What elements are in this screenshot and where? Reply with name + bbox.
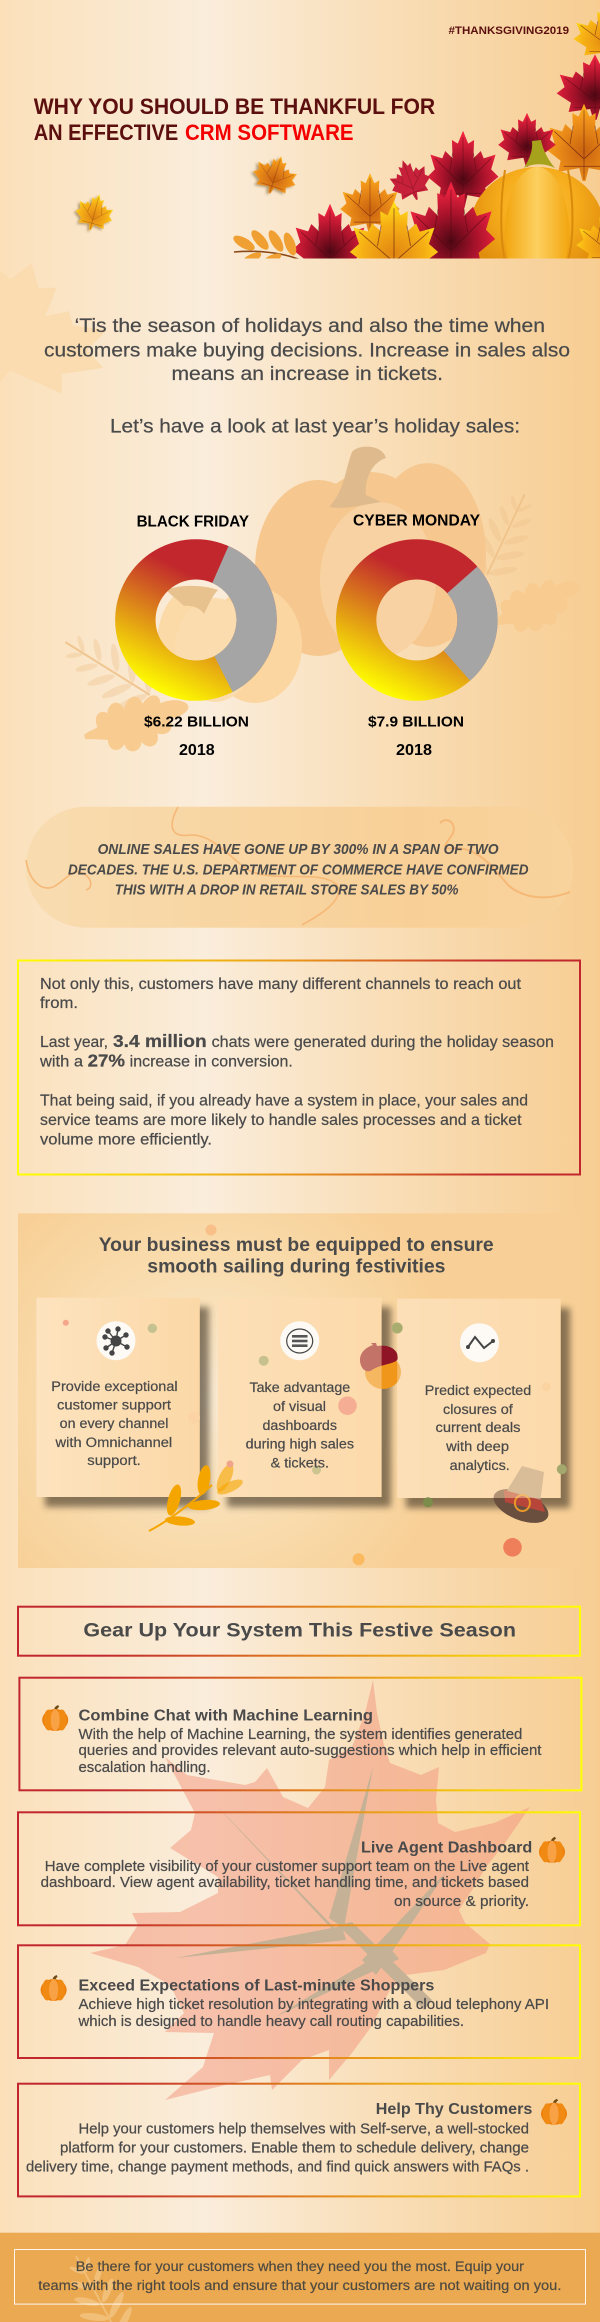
description: Have complete visibility of your customer support team on the Live agent bbox=[45, 1859, 529, 1875]
icon: dashboards bbox=[280, 1321, 319, 1360]
leaf: big red front bbox=[410, 182, 495, 258]
callout text: DECADES. THE U.S. DEPARTMENT OF COMMERCE HAVE CONFIRMED bbox=[68, 862, 529, 878]
golden branch bbox=[149, 1462, 245, 1531]
leaf: amber right bbox=[547, 104, 600, 181]
paragraphs: 3.4 million bbox=[113, 1031, 207, 1051]
description: Achieve high ticket resolution by integrating with a cloud telephony API bbox=[78, 1997, 549, 2013]
paragraphs: with a bbox=[39, 1054, 83, 1071]
heading: Combine Chat with Machine Learning bbox=[78, 1708, 373, 1725]
feature box: Exceed Expectations of Last-minute Shoppers bbox=[18, 1945, 580, 2058]
card 3 text: current deals bbox=[436, 1420, 521, 1435]
card 3 text: Predict expected bbox=[425, 1383, 531, 1398]
intro text: Let’s have a look at last year’s holiday sales: bbox=[110, 417, 520, 438]
faded oak leaf right bbox=[484, 567, 590, 645]
description: dashboard. View agent availability, ticket handling time, and tickets based bbox=[41, 1875, 529, 1891]
background maple leaf, top left bbox=[0, 232, 127, 418]
leaf: big red behind pumpkin bbox=[427, 131, 499, 208]
card 1 text: with Omnichannel bbox=[54, 1435, 172, 1450]
icon: pumpkin bbox=[539, 1837, 565, 1863]
card 2 text: & tickets. bbox=[271, 1455, 329, 1470]
callout text: THIS WITH A DROP IN RETAIL STORE SALES BY 50% bbox=[115, 883, 459, 899]
footer frame bbox=[14, 2250, 586, 2304]
description bbox=[26, 2121, 529, 2175]
card 1 text: support. bbox=[87, 1453, 141, 1468]
feature box: Live Agent Dashboard bbox=[18, 1812, 580, 1925]
chart: Cyber Monday bbox=[336, 513, 498, 759]
pilgrim hat bbox=[489, 1466, 553, 1530]
icon: analytics bbox=[460, 1323, 499, 1362]
pumpkin bbox=[474, 140, 600, 258]
paragraphs: That being said, if you already have a system in place, your sales and bbox=[40, 1093, 528, 1110]
label: Cyber Monday: CYBER MONDAY bbox=[353, 513, 480, 530]
year: 2018 bbox=[396, 742, 432, 759]
card fade overlay bbox=[218, 1298, 561, 1498]
card 2 text bbox=[246, 1380, 354, 1470]
year: 2018 bbox=[179, 742, 215, 759]
icon: omnichannel network bbox=[96, 1321, 136, 1360]
paragraphs: from. bbox=[40, 995, 78, 1012]
leaf: amber left of cluster bbox=[340, 173, 400, 234]
footer bbox=[0, 2233, 600, 2322]
card 2 text: during high sales bbox=[246, 1436, 354, 1451]
card shadows bbox=[45, 1307, 570, 1508]
heading: Live Agent Dashboard bbox=[361, 1840, 532, 1857]
leaf: yellow top right bbox=[574, 12, 600, 56]
leaf: red lower left bbox=[296, 204, 364, 258]
value: $6.22 billion: $6.22 BILLION bbox=[144, 714, 249, 731]
leaf: red right edge bbox=[557, 54, 600, 120]
panel: equipped business bbox=[18, 1213, 580, 1568]
intro text: ‘Tis the season of holidays and also the time when bbox=[75, 316, 545, 337]
title bbox=[34, 94, 435, 145]
squiggle decoration bbox=[26, 807, 570, 925]
intro text: customers make buying decisions. Increase in sales also bbox=[44, 341, 570, 362]
title: AN EFFECTIVE bbox=[34, 120, 178, 145]
decorative dot top bbox=[206, 1224, 216, 1236]
card 2 text: dashboards bbox=[262, 1418, 337, 1433]
callout text bbox=[68, 842, 529, 899]
faded left fern bbox=[50, 617, 167, 721]
description: queries and provides relevant auto-suggestions which help in efficient bbox=[78, 1743, 542, 1759]
description: With the help of Machine Learning, the system identifies generated bbox=[78, 1727, 522, 1743]
chart: Black Friday bbox=[115, 514, 277, 759]
card 1 background bbox=[36, 1298, 200, 1497]
faded oak leaf left bbox=[78, 684, 196, 763]
card 1 text: Provide exceptional bbox=[51, 1379, 178, 1394]
title: CRM SOFTWARE bbox=[185, 120, 354, 145]
heading: Your business must be equipped to ensure bbox=[99, 1234, 494, 1256]
leaf: yellow bottom right bbox=[576, 217, 600, 258]
card 3 background bbox=[397, 1299, 561, 1498]
callout text: ONLINE SALES HAVE GONE UP BY 300% IN A SPAN OF TWO bbox=[98, 842, 499, 858]
floating leaf: centre bbox=[249, 150, 302, 200]
orange leaf branch bbox=[233, 230, 299, 258]
floating leaf: left bbox=[72, 189, 118, 235]
leaf: small crimson bbox=[498, 113, 556, 167]
heading: Help Thy Customers bbox=[376, 2101, 532, 2118]
paragraphs: service teams are more likely to handle sales processes and a ticket bbox=[40, 1112, 522, 1129]
card 3 text bbox=[425, 1383, 531, 1473]
decorative dots bbox=[63, 1320, 567, 1565]
description: on source & priority. bbox=[394, 1894, 529, 1910]
panel: channels text box bbox=[18, 960, 580, 1174]
section heading box bbox=[18, 1607, 580, 1656]
card 1 text: customer support bbox=[57, 1397, 171, 1412]
label: Black Friday: BLACK FRIDAY bbox=[137, 514, 249, 531]
donut: Cyber Monday bbox=[336, 539, 498, 701]
description: escalation handling. bbox=[78, 1760, 210, 1776]
footer fern bbox=[53, 2244, 142, 2322]
card 2 text: of visual bbox=[273, 1399, 326, 1414]
paragraphs: 27% bbox=[88, 1051, 125, 1071]
donut: Black Friday bbox=[115, 539, 277, 701]
paragraphs: volume more efficiently. bbox=[40, 1131, 212, 1148]
header illustration: pumpkin and autumn leaves bbox=[233, 12, 600, 258]
value: $7.9 billion: $7.9 BILLION bbox=[368, 714, 464, 731]
leaf: yellow front bbox=[350, 201, 438, 258]
paragraphs bbox=[39, 976, 554, 1148]
card 3 text: analytics. bbox=[450, 1458, 510, 1473]
paragraphs: Last year, bbox=[40, 1034, 108, 1051]
description: delivery time, change payment methods, and find quick answers with FAQs . bbox=[26, 2159, 529, 2175]
footer text: Be there for your customers when they need you the most. Equip your bbox=[76, 2259, 525, 2274]
faded small pumpkin bbox=[157, 586, 302, 703]
hashtag: #THANKSGIVING2019 bbox=[448, 25, 569, 37]
description bbox=[78, 1727, 542, 1776]
icon: pumpkin bbox=[41, 1975, 67, 2001]
icon: pumpkin bbox=[42, 1705, 68, 1731]
faded right fern bbox=[462, 483, 549, 587]
faded large pumpkin bbox=[255, 447, 486, 658]
leaf veins bbox=[176, 1767, 448, 2017]
feature box: Combine Chat with Machine Learning bbox=[19, 1678, 581, 1790]
card 1 text bbox=[51, 1379, 178, 1468]
background faded pumpkin illustration bbox=[50, 447, 590, 763]
leaf: crimson sprig bbox=[390, 160, 430, 200]
description: platform for your customers. Enable them to schedule delivery, change bbox=[60, 2140, 529, 2156]
intro text bbox=[44, 316, 570, 438]
title: WHY YOU SHOULD BE THANKFUL FOR bbox=[34, 94, 435, 119]
card 1 text: on every channel bbox=[60, 1416, 168, 1431]
footer text: teams with the right tools and ensure that your customers are not waiting on you. bbox=[38, 2278, 561, 2293]
callout pill bbox=[26, 807, 573, 928]
intro text: means an increase in tickets. bbox=[172, 364, 443, 385]
description: which is designed to handle heavy call routing capabilities. bbox=[77, 2014, 464, 2030]
card 3 text: with deep bbox=[445, 1439, 509, 1454]
description bbox=[77, 1997, 549, 2030]
card 2 text: Take advantage bbox=[250, 1380, 350, 1395]
acorn bbox=[360, 1343, 401, 1389]
paragraphs: increase in conversion. bbox=[130, 1054, 293, 1071]
footer text bbox=[38, 2259, 561, 2293]
heading: smooth sailing during festivities bbox=[147, 1256, 446, 1278]
card 3 text: closures of bbox=[443, 1402, 513, 1417]
heading text: Gear Up Your System This Festive Season bbox=[83, 1620, 516, 1642]
card 2 background bbox=[218, 1298, 382, 1497]
feature box: Help Thy Customers bbox=[18, 2084, 580, 2196]
paragraphs: Not only this, customers have many different channels to reach out bbox=[40, 976, 522, 993]
large background maple leaf bbox=[90, 1680, 530, 2100]
icon: pumpkin bbox=[541, 2099, 567, 2125]
description: Help your customers help themselves with Self-serve, a well-stocked bbox=[78, 2121, 529, 2137]
description bbox=[41, 1859, 529, 1910]
paragraphs: chats were generated during the holiday season bbox=[212, 1034, 554, 1051]
heading bbox=[99, 1234, 494, 1278]
heading: Exceed Expectations of Last-minute Shoppers bbox=[78, 1978, 435, 1995]
